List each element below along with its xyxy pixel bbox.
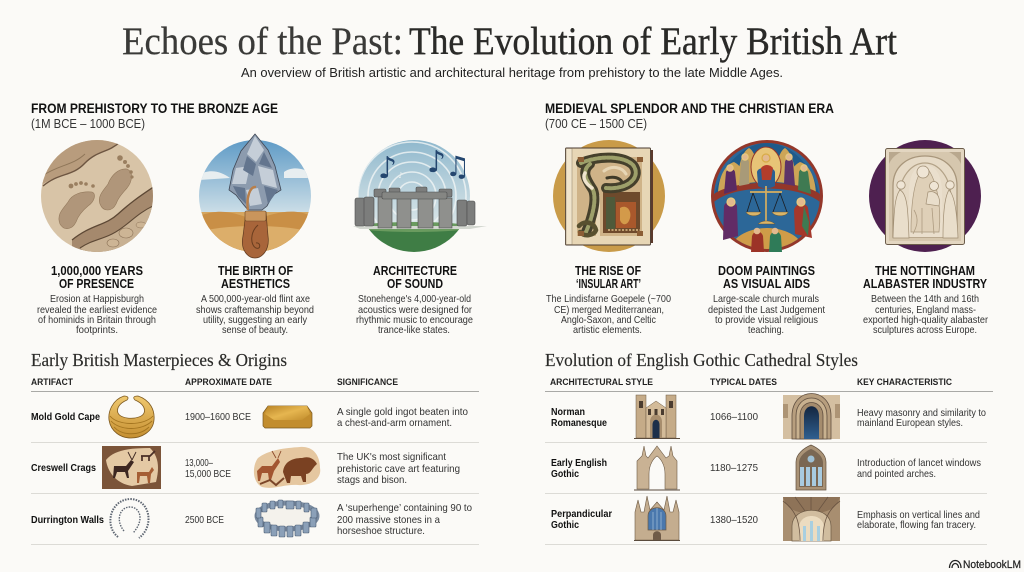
- icon: perpendicular cathedral: [634, 496, 680, 540]
- text: doom paintings: Large-scale church murals: [713, 294, 819, 305]
- row: early english gothic: 1180–1275: [710, 463, 758, 474]
- row: early english gothic: [551, 445, 981, 490]
- text: 1,000,000 years: [37, 264, 157, 336]
- row: norman romanesque: [551, 394, 986, 439]
- row: mold gold cape: [31, 396, 468, 438]
- icon: romanesque arch: [783, 394, 840, 439]
- row: mold gold cape: Mold Gold Cape: [31, 412, 100, 423]
- row: durrington walls: 200 massive stones in a: [337, 515, 440, 526]
- text: 1,000,000 years: revealed the earliest evidence: [37, 305, 157, 316]
- row: mold gold cape: a chest-and-arm ornament.: [337, 418, 452, 429]
- icon: lancet window: [796, 445, 826, 490]
- row: creswell crags: 15,000 BCE: [185, 469, 231, 480]
- row: perpendicular gothic: 1380–1520: [710, 515, 758, 526]
- icon: fan vault: [783, 497, 840, 541]
- text: birth of aesthetics: THE BIRTH OF: [218, 264, 293, 278]
- row: norman romanesque: Heavy masonry and similarity to: [857, 408, 986, 419]
- text: birth of aesthetics: shows craftemanship beyond: [196, 305, 314, 316]
- icon: stag and bison rock: [254, 447, 320, 488]
- subtitle: An overview of British artistic and architectural heritage from prehistory to the late Middle Ages.: [241, 66, 783, 80]
- section heading: prehistory: (1M BCE – 1000 BCE): [31, 117, 145, 131]
- row: creswell crags: stags and bison.: [337, 475, 407, 486]
- text: architecture of sound: [356, 264, 473, 336]
- text: doom paintings: to provide visual religious: [715, 315, 818, 326]
- text: nottingham alabaster: [863, 264, 988, 336]
- text: nottingham alabaster: exported high-quality alabaster: [863, 315, 988, 326]
- text: insular art: CE) merged Mediterranean,: [554, 305, 664, 316]
- text: insular art: ‘INSULAR ART’: [576, 277, 641, 291]
- section heading: medieval: [545, 101, 834, 131]
- table heading: masterpieces: Early British Masterpieces & Origins: [31, 350, 287, 370]
- title: Echoes of the Past:: [122, 20, 403, 63]
- row: norman romanesque: mainland European styles.: [857, 418, 963, 429]
- text: architecture of sound: ARCHITECTURE: [373, 264, 457, 278]
- row: creswell crags: [31, 446, 460, 489]
- title: The Evolution of Early British Art: [409, 20, 897, 63]
- row: mold gold cape: 1900–1600 BCE: [185, 412, 251, 423]
- text: doom paintings: [708, 264, 825, 336]
- section heading: medieval: (700 CE – 1500 CE): [545, 117, 647, 131]
- column headers: gothic: TYPICAL DATES: [710, 377, 778, 388]
- row: durrington walls: [31, 499, 472, 538]
- row: early english gothic: and pointed arches.: [857, 469, 936, 480]
- row: perpendicular gothic: elaborate, flowing fan tracery.: [857, 520, 976, 531]
- icon: cave painting: [102, 446, 161, 489]
- table: gothic cathedral styles: [545, 350, 993, 544]
- row: perpendicular gothic: Gothic: [551, 520, 579, 531]
- row: mold gold cape: A single gold ingot beaten into: [337, 407, 468, 418]
- row: durrington walls: A ‘superhenge’ containing 90 to: [337, 503, 472, 514]
- row: perpendicular gothic: Emphasis on vertical lines and: [857, 510, 980, 521]
- row: creswell crags: The UK's most significant: [337, 452, 446, 463]
- text: architecture of sound: OF SOUND: [387, 277, 443, 291]
- text: birth of aesthetics: sense of beauty.: [222, 325, 288, 336]
- icon: norman cathedral: [634, 395, 680, 438]
- icon: stonehenge and music: ♪: [398, 171, 403, 180]
- logo: NotebookLM: NotebookLM: [963, 559, 1021, 571]
- row: early english gothic: Early English: [551, 458, 607, 469]
- column headers: masterpieces: APPROXIMATE DATE: [185, 377, 273, 388]
- panel: medieval splendor: [545, 101, 988, 336]
- section heading: prehistory: FROM PREHISTORY TO THE BRONZE AGE: [31, 101, 278, 116]
- text: birth of aesthetics: [196, 264, 314, 336]
- row: norman romanesque: Norman: [551, 407, 585, 418]
- icon: stonehenge and music: ♪: [427, 145, 446, 180]
- column headers: masterpieces: ARTIFACT: [31, 377, 73, 388]
- text: architecture of sound: trance-like states.: [378, 325, 450, 336]
- text: doom paintings: AS VISUAL AIDS: [723, 277, 810, 291]
- text: 1,000,000 years: OF PRESENCE: [59, 277, 134, 291]
- icon: illuminated manuscript: [553, 140, 665, 252]
- icon: horseshoe plan: [110, 499, 149, 538]
- row: norman romanesque: 1066–1100: [710, 412, 758, 423]
- icon: flint axe: [199, 134, 312, 258]
- text: architecture of sound: rhythmic music to encourage: [356, 315, 473, 326]
- text: insular art: THE RISE OF: [575, 264, 641, 278]
- panel: prehistory to the bronze age: [31, 101, 487, 336]
- text: insular art: [546, 264, 671, 336]
- icon: early english arch: [634, 446, 680, 490]
- icon: footprints in rock: [41, 140, 153, 252]
- row: durrington walls: Durrington Walls: [31, 515, 104, 526]
- row: early english gothic: Introduction of lancet windows: [857, 458, 981, 469]
- section heading: medieval: MEDIEVAL SPLENDOR AND THE CHRISTIAN ERA: [545, 101, 834, 116]
- table: early british masterpieces: [31, 350, 479, 544]
- row: creswell crags: 13,000–: [185, 458, 213, 469]
- column headers: masterpieces: SIGNIFICANCE: [337, 377, 399, 388]
- row: creswell crags: prehistoric cave art featuring: [337, 464, 460, 475]
- row: perpendicular gothic: Perpandicular: [551, 509, 612, 520]
- row: early english gothic: Gothic: [551, 469, 579, 480]
- icon: alabaster relief: [869, 140, 981, 252]
- title: [122, 20, 897, 63]
- text: nottingham alabaster: THE NOTTINGHAM: [875, 264, 975, 278]
- text: insular art: Anglo-Saxon, and Celtic: [561, 315, 656, 326]
- text: nottingham alabaster: ALABASTER INDUSTRY: [863, 277, 988, 291]
- text: doom paintings: DOOM PAINTINGS: [718, 264, 815, 278]
- column headers: gothic: ARCHITECTURAL STYLE: [550, 377, 654, 388]
- icon: gold ingot: [263, 406, 312, 428]
- table heading: gothic: Evolution of English Gothic Cathedral Styles: [545, 350, 858, 370]
- column headers: gothic: KEY CHARACTERISTIC: [857, 377, 952, 388]
- icon: stonehenge and music: ♫: [445, 150, 470, 183]
- row: durrington walls: horseshoe structure.: [337, 526, 425, 537]
- text: birth of aesthetics: A 500,000-year-old flint axe: [201, 294, 310, 305]
- icon: stonehenge and music: [353, 140, 487, 254]
- row: durrington walls: 2500 BCE: [185, 515, 224, 526]
- text: insular art: The Lindisfarne Goepele (~700: [546, 294, 671, 305]
- text: 1,000,000 years: 1,000,000 YEARS: [51, 264, 143, 278]
- icon: stonehenge and music: ♪: [378, 151, 397, 186]
- text: doom paintings: depisted the Last Judgement: [708, 305, 825, 316]
- text: nottingham alabaster: Between the 14th and 16th: [871, 294, 979, 305]
- text: birth of aesthetics: AESTHETICS: [221, 277, 290, 291]
- icon: stone ring: [256, 500, 317, 537]
- text: 1,000,000 years: of hominids in Britain through: [38, 315, 156, 326]
- text: insular art: artistic elements.: [573, 325, 642, 336]
- section heading: prehistory: [31, 101, 278, 131]
- icon: doom painting: [711, 140, 823, 252]
- text: birth of aesthetics: utility, suggesting an early: [203, 315, 308, 326]
- text: 1,000,000 years: Erosion at Happisburgh: [50, 294, 144, 305]
- row: creswell crags: Creswell Crags: [31, 463, 96, 474]
- text: doom paintings: teaching.: [748, 325, 784, 336]
- text: nottingham alabaster: centuries, England mass-: [875, 305, 976, 316]
- text: nottingham alabaster: sculptures across Europe.: [873, 325, 977, 336]
- text: architecture of sound: Stonehenge's 4,000-year-old: [358, 294, 471, 305]
- icon: gold cape: [109, 396, 154, 438]
- column headers: gothic: [550, 377, 952, 388]
- text: architecture of sound: acoustics were designed for: [358, 305, 473, 316]
- text: 1,000,000 years: footprints.: [76, 325, 118, 336]
- row: perpendicular gothic: [551, 496, 980, 541]
- column headers: masterpieces: [31, 377, 399, 388]
- row: norman romanesque: Romanesque: [551, 418, 607, 429]
